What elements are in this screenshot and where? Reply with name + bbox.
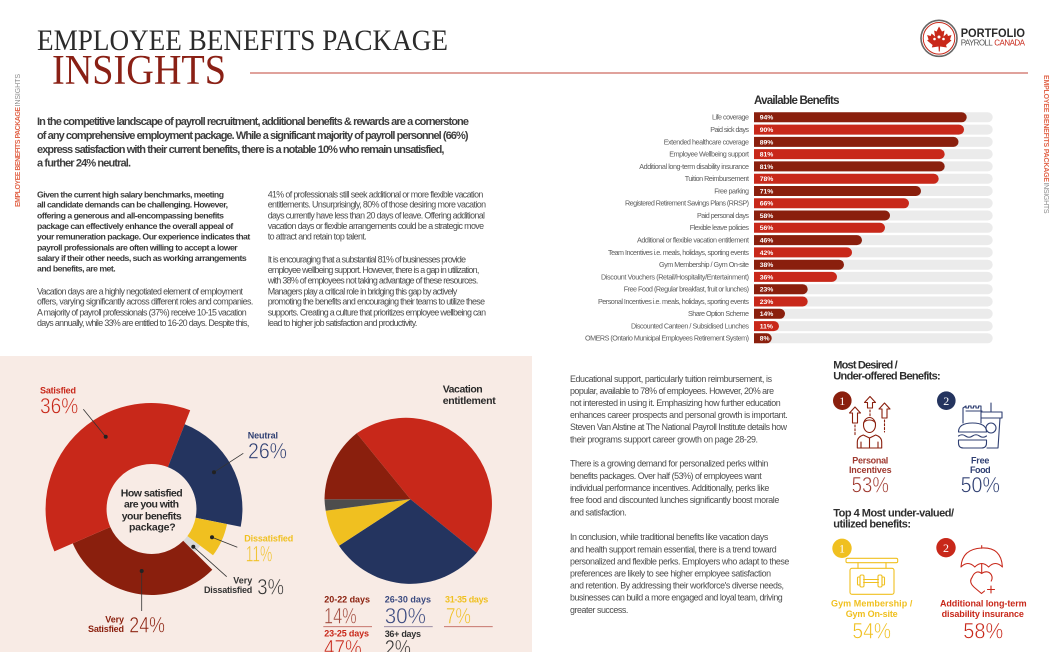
stat: gym membership 54%: Gym On-site — [846, 609, 898, 619]
label: very satisfied: 24% — [129, 613, 165, 638]
title: EMPLOYEE BENEFITS PACKAGE — [37, 24, 448, 57]
text block: left column: offers, varying significantly across different roles and companies. — [37, 297, 253, 307]
bar values: 71% — [760, 188, 773, 195]
intro paragraph: In the competitive landscape of payroll recruitment, additional benefits & rewards are a cornerstone — [37, 116, 469, 128]
pie chart: vacation entitlement — [323, 384, 496, 652]
pie heading — [443, 384, 496, 407]
legend: 31-35 days: 31-35 days — [445, 595, 488, 605]
bar labels: Free parking — [714, 186, 749, 195]
label: satisfied: Satisfied — [40, 385, 76, 395]
icon: gym sign — [846, 558, 898, 594]
text block: second column: with 38% of employees not taking advantage of these resources. — [267, 276, 478, 286]
legend: 23-25 days — [324, 629, 369, 652]
title — [37, 24, 448, 94]
segment: neutral — [168, 424, 242, 527]
text block: left column: your remuneration package. Our experience indicates that — [37, 232, 250, 242]
heading: most desired benefits: Under-offered Benefits: — [833, 370, 941, 382]
left sidebar label: INSIGHTS — [15, 74, 22, 106]
label: very dissatisfied: Very — [233, 576, 252, 586]
bar labels: Personal Incentives i.e. meals, holidays, sporting events — [598, 297, 749, 306]
bar labels: Discounted Canteen / Subsidised Lunches — [631, 322, 749, 330]
donut centre question: are you with — [124, 499, 179, 511]
text block: left column: Vacation days are a highly negotiated element of employment — [37, 286, 244, 296]
stat: personal incentives 53%: Personal — [852, 455, 888, 465]
text block: third column: enhances career prospects and personal growth is important. — [570, 410, 788, 420]
bar labels: Paid personal days — [697, 211, 749, 220]
logo: Portfolio Payroll Canada — [921, 20, 1026, 56]
label: dissatisfied — [244, 534, 293, 567]
intro paragraph: of any comprehensive employment package. While a significant majority of payroll personnel (66%) — [37, 130, 469, 142]
text block: third column — [570, 374, 789, 615]
bar labels: Share Option Scheme — [688, 309, 749, 318]
legend: 23-25 days: 23-25 days — [324, 629, 369, 639]
stat: gym membership 54%: 54% — [852, 618, 891, 643]
leader lines — [83, 409, 243, 611]
segment: satisfied — [46, 403, 190, 551]
text block: second column: vacation days or flexible arrangements could be a strategic move — [268, 221, 484, 231]
badge: rank 1 yellow: 1 — [839, 542, 845, 556]
donut centre question: package? — [129, 522, 176, 534]
text block: second column: employee wellbeing support. However, there is a gap in utilization, — [268, 265, 479, 275]
bar labels: Registered Retirement Savings Plans (RRSP) — [625, 199, 749, 208]
bar chart: available benefits — [585, 95, 993, 343]
label: very dissatisfied — [204, 574, 284, 599]
panel: pink chart background — [0, 356, 532, 652]
label: satisfied: 36% — [40, 394, 78, 419]
bar labels: OMERS (Ontario Municipal Employees Retirement System) — [585, 334, 749, 343]
heading: most under-valued benefits: utilized benefits: — [833, 519, 911, 531]
bar values: 90% — [760, 127, 773, 134]
legend: 36+ days — [385, 629, 421, 652]
label: dissatisfied: 11% — [246, 542, 272, 567]
text block: left column — [37, 189, 253, 328]
bar labels: Gym Membership / Gym On-site — [659, 260, 749, 269]
bar values: 58% — [760, 213, 773, 220]
label: very dissatisfied: 3% — [257, 574, 284, 599]
segment: dissatisfied — [187, 518, 227, 555]
bar labels: Tuition Reimbursement — [685, 174, 749, 183]
bar values: 23% — [760, 299, 773, 306]
donut chart: benefit satisfaction — [40, 385, 293, 638]
legend: 31-35 days — [444, 595, 493, 628]
label: very satisfied — [88, 613, 165, 638]
stat: free food 50%: Free — [971, 455, 989, 465]
stat: disability insurance 58%: disability insurance — [942, 609, 1024, 619]
bar labels: Discount Vouchers (Retail/Hospitality/Entertainment) — [601, 272, 749, 281]
bar values: 66% — [760, 201, 773, 208]
text block: third column: greater success. — [570, 605, 628, 615]
label: neutral — [248, 430, 287, 463]
label: very satisfied: Very — [105, 615, 124, 625]
right sidebar label: EMPLOYEE BENEFITS PACKAGE — [1042, 75, 1049, 182]
donut centre question — [121, 487, 183, 534]
bar labels: Paid sick days — [710, 125, 749, 134]
legend: 26-30 days — [384, 595, 433, 628]
bar values: 56% — [760, 225, 773, 232]
stat: gym membership 54%: Gym Membership / — [831, 599, 913, 609]
bar labels: Additional long-term disability insurance — [639, 162, 749, 171]
red bars — [754, 125, 964, 331]
text block: third column: personalized and flexible perks. Employers who adapt to these — [570, 556, 789, 566]
stat: free food 50%: Food — [970, 465, 991, 475]
badge: rank 2 navy — [937, 391, 956, 410]
badge: rank 2 red — [936, 538, 956, 557]
bar values: 46% — [760, 238, 773, 244]
badge: rank 1 dark red — [833, 391, 852, 410]
stat: personal incentives 53%: 53% — [852, 473, 889, 498]
bar labels: Additional or flexible vacation entitlement — [637, 236, 749, 244]
text block: left column: and benefits, are met. — [37, 264, 116, 274]
text block: third column: and retention. By addressing their workforce's diverse needs, — [570, 580, 784, 590]
text block: third column: Steven Van Alstine at The National Payroll Institute details how — [570, 422, 788, 432]
legend: 36+ days: 36+ days — [385, 629, 421, 639]
text block: left column: salary if their other needs, such as working arrangements — [37, 253, 247, 263]
legend: 26-30 days: 30% — [385, 603, 426, 628]
segment: very dissatisfied — [183, 536, 200, 552]
intro paragraph: express satisfaction with their current benefits, there is a notable 10% who remain unsatisfied, — [37, 144, 444, 156]
text block: left column: A majority of payroll professionals (37%) receive 10-15 vacation — [37, 307, 247, 317]
heading: most desired benefits: Most Desired / — [833, 359, 898, 371]
label: neutral: 26% — [248, 438, 287, 463]
badge: rank 2 navy: 2 — [943, 394, 949, 408]
bar labels: Life coverage — [712, 113, 749, 122]
bar values: 23% — [760, 287, 773, 294]
text block: third column: Educational support, particularly tuition reimbursement, is — [570, 374, 773, 384]
intro paragraph — [37, 116, 469, 170]
pie heading: Vacation — [443, 384, 483, 396]
slice: 36+ days — [324, 499, 410, 511]
bar values: 81% — [760, 152, 773, 158]
bar labels: Team Incentives i.e. meals, holidays, sporting events — [608, 248, 749, 257]
bar labels: Extended healthcare coverage — [664, 137, 749, 146]
bar labels — [585, 113, 749, 343]
dark bars — [754, 112, 967, 343]
stat: free food 50%: 50% — [961, 473, 1000, 498]
badge: rank 1 yellow — [832, 539, 852, 558]
text block: third column: businesses can build a more engaged and loyal team, driving — [570, 593, 783, 603]
icon: umbrella and heart — [961, 546, 1002, 594]
text block: left column: days annually, while 33% are entitled to 16-20 days. Despite this, — [37, 318, 249, 328]
text block: second column: It is encouraging that a substantial 81% of businesses provide — [268, 255, 466, 265]
icon: personal incentives — [850, 396, 890, 448]
text block: second column — [267, 189, 486, 328]
intro paragraph: a further 24% neutral. — [37, 158, 131, 170]
right sidebar label: INSIGHTS — [1042, 182, 1049, 214]
text block: second column: lead to higher job satisfaction and productivity. — [268, 318, 417, 328]
bar values — [760, 115, 773, 343]
icon: free food — [958, 403, 1002, 448]
label: very dissatisfied: Dissatisfied — [204, 585, 252, 595]
legend: 20-22 days — [323, 595, 372, 628]
logo: Portfolio Payroll Canada: PORTFOLIO — [961, 28, 1025, 40]
text block: third column: not interested in using it. Emphasizing how further education — [570, 398, 781, 408]
bar values: 38% — [760, 262, 773, 269]
text block: second column: entitlements. Unsurprisingly, 80% of those desiring more vacation — [268, 200, 486, 210]
text block: third column: and satisfaction. — [570, 508, 627, 518]
bar values: 8% — [760, 336, 770, 343]
text block: second column: Managers play a critical role in bridging this gap by actively — [268, 286, 458, 296]
title: INSIGHTS — [52, 48, 226, 94]
chart heading: Available Benefits — [754, 95, 840, 107]
text block: third column: preferences are likely to see higher employee satisfaction — [570, 568, 771, 578]
stat: disability insurance 58% — [940, 599, 1027, 643]
text block: second column: promoting the benefits and encouraging their teams to utilize these — [268, 297, 485, 307]
bar values: 81% — [760, 164, 773, 171]
bar values: 94% — [760, 115, 773, 122]
badge: rank 2 red: 2 — [943, 541, 949, 555]
text block: second column: supports. Creating a culture that prioritizes employee wellbeing can — [268, 307, 486, 317]
heading: most under-valued benefits: Top 4 Most under-valued/ — [833, 507, 954, 519]
text block: second column: days currently have less than 20 days of leave. Offering additional — [268, 210, 485, 220]
text block: second column: to attract and retain top talent. — [268, 232, 367, 242]
bar values: 78% — [760, 176, 773, 183]
text block: third column: In conclusion, while traditional benefits like vacation days — [570, 532, 769, 542]
bar labels: Free Food (Regular breakfast, fruit or lunches) — [624, 285, 749, 294]
label: neutral: Neutral — [248, 430, 278, 440]
logo: Portfolio Payroll Canada: CANADA — [994, 38, 1026, 47]
text block: third column: free food and discounted lunches significantly boost morale — [570, 495, 779, 505]
text block: left column: payroll professionals are often willing to accept a lower — [37, 242, 238, 252]
bar values: 11% — [760, 324, 773, 330]
slice: 23-25 days — [357, 418, 492, 553]
logo: Portfolio Payroll Canada: PAYROLL — [961, 38, 993, 47]
bar labels: Employee Wellbeing support — [669, 150, 749, 158]
bar values: 42% — [760, 250, 773, 257]
text block: third column: their programs support career growth on page 28-29. — [570, 434, 758, 444]
bar values: 14% — [760, 311, 773, 318]
text block: third column: and health support remain essential, there is a trend toward — [570, 544, 777, 554]
heading: most desired benefits — [833, 359, 941, 382]
donut centre question: your benefits — [122, 511, 182, 523]
stat: personal incentives 53% — [849, 455, 892, 498]
text block: third column: individual performance incentives. Additionally, perks like — [570, 483, 769, 493]
text block: left column: Given the current high salary benchmarks, meeting — [37, 189, 224, 199]
text block: second column: 41% of professionals still seek additional or more flexible vacation — [268, 189, 483, 199]
bar labels: Flexible leave policies — [690, 223, 749, 232]
pie heading: entitlement — [443, 395, 496, 407]
left sidebar label: EMPLOYEE BENEFITS PACKAGE — [15, 107, 22, 207]
legend: 20-22 days: 14% — [324, 603, 357, 628]
stat: free food 50% — [961, 455, 1000, 498]
slice: 20-22 days — [324, 433, 410, 499]
segment: very satisfied — [73, 527, 212, 595]
label: dissatisfied: Dissatisfied — [244, 534, 293, 544]
slice: 26-30 days — [339, 499, 477, 584]
text block: third column: There is a growing demand for personalized perks within — [570, 459, 768, 469]
bar tracks — [754, 112, 993, 343]
bar values: 89% — [760, 139, 773, 146]
text block: third column: popular, available to 78% of employees. However, 20% are — [570, 386, 774, 396]
badge: rank 1 dark red: 1 — [839, 394, 845, 408]
stat: personal incentives 53%: Incentives — [849, 465, 892, 475]
bar values: 36% — [760, 274, 773, 281]
heading: most under-valued benefits — [833, 507, 954, 531]
donut centre question: How satisfied — [121, 487, 183, 499]
stat: disability insurance 58%: 58% — [963, 618, 1003, 643]
text block: left column: package can effectively enhance the overall appeal of — [37, 221, 233, 231]
legend: 31-35 days: 7% — [446, 603, 471, 628]
text block: left column: all candidate demands can be challenging. However, — [37, 200, 228, 210]
text block: left column: offering a generous and all-encompassing benefits — [37, 210, 224, 220]
label: satisfied — [40, 385, 78, 419]
text block: third column: benefits packages. Over half (53%) of employees want — [570, 471, 762, 481]
label: very satisfied: Satisfied — [88, 624, 124, 634]
slice: 31-35 days — [326, 499, 410, 546]
legend: 20-22 days: 20-22 days — [324, 595, 370, 605]
legend: 26-30 days: 26-30 days — [385, 595, 431, 605]
stat: disability insurance 58%: Additional long-term — [940, 599, 1027, 609]
stat: gym membership 54% — [831, 599, 913, 643]
